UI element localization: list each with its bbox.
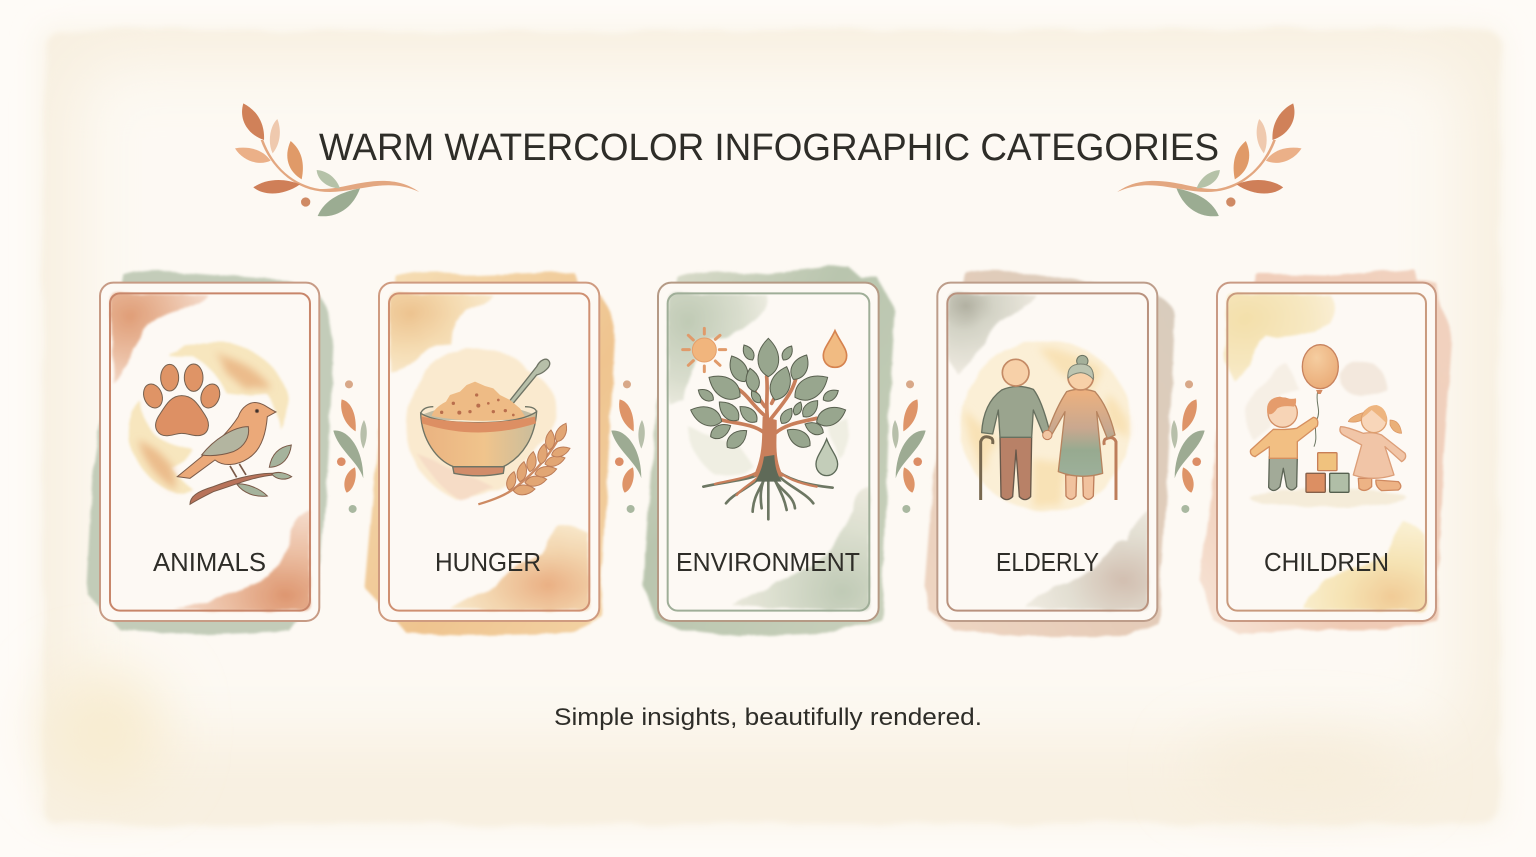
icon: elderly woman xyxy=(1043,355,1116,500)
icon: left sprig xyxy=(235,103,419,216)
label: environment: ENVIRONMENT xyxy=(676,547,860,577)
icon: right sprig xyxy=(1117,103,1302,216)
wash xyxy=(407,348,557,500)
label: animals: ANIMALS xyxy=(153,547,266,577)
icon: bird on branch xyxy=(177,403,292,504)
label: children: CHILDREN xyxy=(1264,547,1389,577)
icon: elderly man xyxy=(981,359,1049,500)
icon: connector 4 xyxy=(1171,380,1205,513)
icon: connector 1 xyxy=(333,380,367,513)
panel: hunger card xyxy=(365,272,615,636)
wash xyxy=(1246,361,1387,440)
icon: boy xyxy=(1250,397,1318,490)
panel: children card xyxy=(1200,268,1452,635)
panel: environment card xyxy=(643,265,895,637)
icon: wheat xyxy=(478,421,571,504)
icon: orange drop xyxy=(823,331,847,367)
icon: connector 2 xyxy=(611,380,645,513)
icon: girl xyxy=(1340,405,1406,491)
wash xyxy=(961,340,1131,511)
panel: animals card xyxy=(87,271,333,635)
panel: elderly card xyxy=(925,270,1175,637)
icon: blocks xyxy=(1306,453,1349,492)
wash xyxy=(129,341,288,493)
icon: grain bowl xyxy=(421,359,550,476)
tagline: Simple insights, beautifully rendered. xyxy=(554,704,982,731)
label: elderly: ELDERLY xyxy=(996,547,1099,577)
ground xyxy=(1249,488,1406,507)
icon: paw xyxy=(140,364,223,436)
icon: sage drop xyxy=(816,439,838,476)
icon: balloon xyxy=(1302,345,1338,447)
title text: WARM WATERCOLOR INFOGRAPHIC CATEGORIES xyxy=(319,127,1219,169)
wash xyxy=(688,420,850,476)
label: hunger: HUNGER xyxy=(435,547,541,577)
icon: tree xyxy=(688,338,849,519)
icon: connector 3 xyxy=(892,380,926,513)
title with laurels xyxy=(235,103,1302,216)
icon: sun xyxy=(683,328,726,372)
